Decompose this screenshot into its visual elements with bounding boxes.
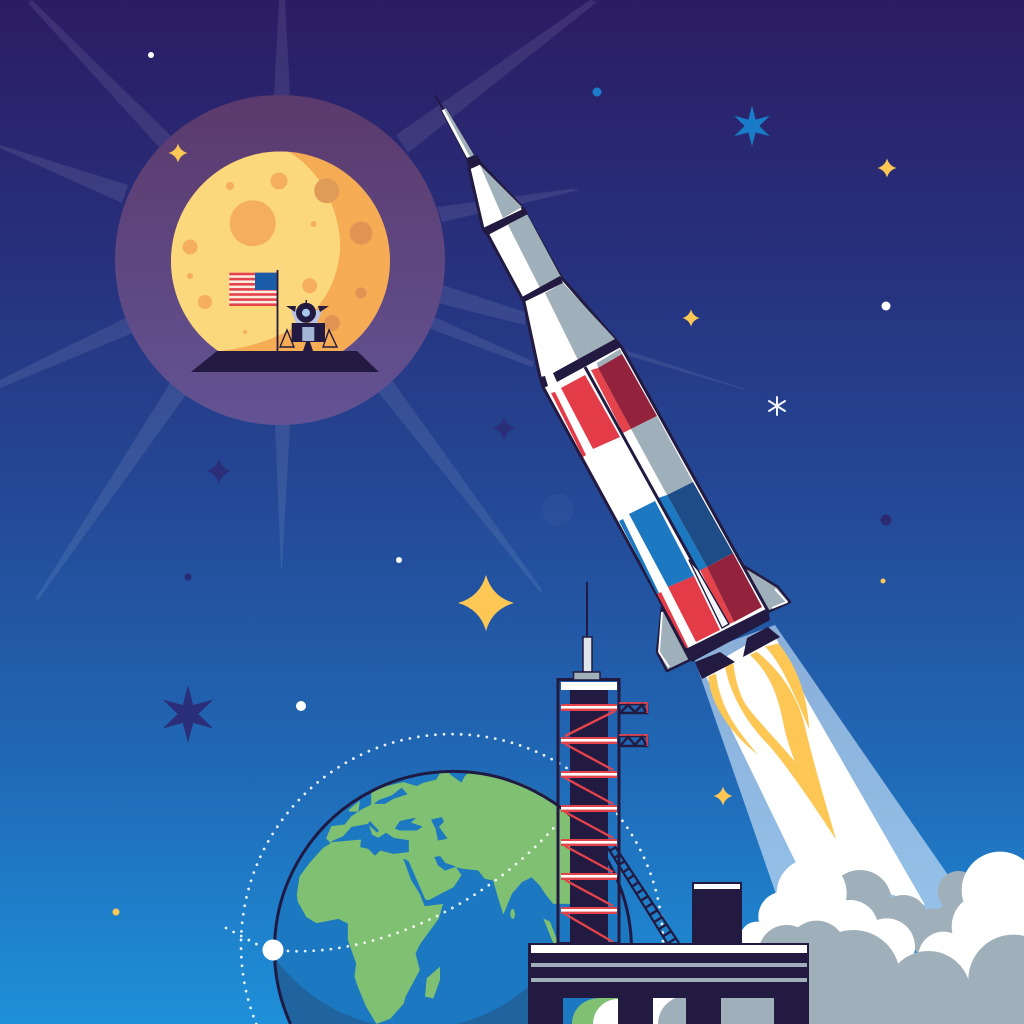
mast base [574,672,600,680]
grey shading of upper stages [480,165,622,368]
booster spike [689,560,729,628]
UK gap and Baltic seas [375,788,407,803]
lunar lander [280,300,337,351]
moon [171,152,390,351]
escape tower [441,108,474,159]
moon halo [115,95,445,425]
centre seam [585,367,727,624]
pad window: smoke [653,998,686,1024]
white asterisk star [769,397,785,415]
access ladder [608,848,679,943]
engine nozzles [695,627,780,679]
launch tower [558,582,647,944]
pad window: earth and cloud [563,998,618,1024]
rocket flames [708,643,836,839]
tower top [561,682,617,690]
earth globe [273,770,633,1024]
exhaust beam [693,625,948,930]
stage bands [483,208,621,388]
rocket [435,95,790,679]
smoke clouds [740,852,1024,1024]
yellow four-point stars [168,144,896,806]
base band [686,608,770,662]
continents [297,772,573,1023]
service block [692,882,742,944]
antenna [435,95,443,109]
launch pad [528,943,809,1024]
collar [466,155,482,170]
moon light rays [0,0,745,600]
blue panels [619,482,733,594]
dotted orbit rings [226,734,663,1024]
mast [583,637,592,672]
dark and coloured stars [163,106,770,743]
red cross braces [565,711,615,942]
small sky stars and dots [112,52,892,916]
lunar ground [191,351,379,372]
platforms [561,704,617,914]
American flag [229,270,278,351]
spire [586,582,588,638]
access arms [619,703,647,746]
spacecraft dot on orbit [262,940,284,960]
right fin [742,565,790,612]
pad window: grey smoke [721,998,774,1024]
hull [469,163,768,650]
grey mid panel [631,416,693,495]
red lower panels [657,553,762,648]
left fin [657,607,690,671]
red upper panels [551,354,657,457]
